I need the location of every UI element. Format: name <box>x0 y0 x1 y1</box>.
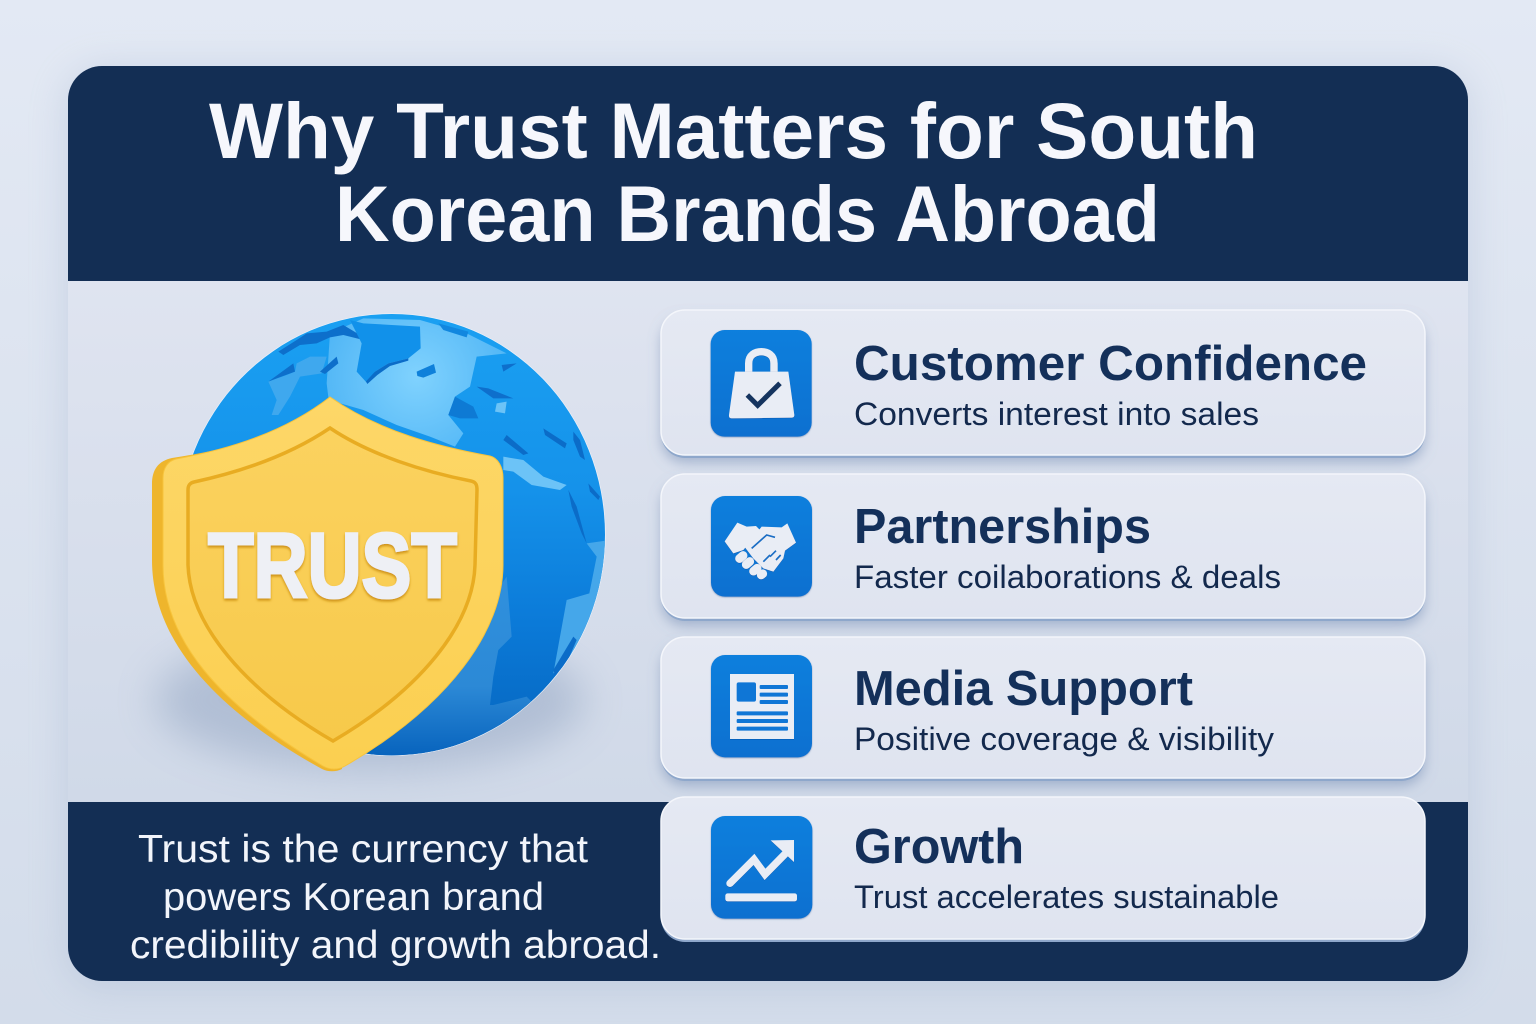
card: partnerships <box>661 474 1425 621</box>
illustration: globe and trust shield <box>152 313 610 771</box>
icon: handshake <box>711 496 812 597</box>
icon: shield <box>152 397 503 771</box>
card description: Faster coilaborations & deals <box>854 559 1281 595</box>
caption: credibility and growth abroad. <box>130 924 661 967</box>
card heading: Growth <box>854 820 1024 874</box>
ground shadow <box>155 630 585 770</box>
icon: newspaper <box>711 655 812 757</box>
title: Why Trust Matters for South <box>209 86 1258 175</box>
icon: growth arrow <box>711 816 812 919</box>
icon: globe <box>178 313 610 760</box>
caption: powers Korean brand <box>163 876 544 919</box>
title <box>209 86 1258 258</box>
card description: Converts interest into sales <box>854 396 1259 432</box>
card description: Positive coverage & visibility <box>854 721 1274 757</box>
icon: shopping bag with check <box>711 330 812 437</box>
card heading: Partnerships <box>854 500 1151 554</box>
caption <box>130 828 661 967</box>
card heading: Media Support <box>854 662 1193 716</box>
card: customer confidence <box>661 310 1425 458</box>
card: media support <box>661 637 1425 781</box>
card description: Trust accelerates sustainable <box>854 879 1279 915</box>
card heading: Customer Confidence <box>854 337 1367 391</box>
title: Korean Brands Abroad <box>335 169 1160 258</box>
shield side <box>152 404 342 771</box>
shield word: TRUST <box>208 515 457 617</box>
card: growth <box>661 797 1425 942</box>
shield rim <box>163 397 503 769</box>
shield face <box>188 428 477 741</box>
caption: Trust is the currency that <box>138 828 588 871</box>
